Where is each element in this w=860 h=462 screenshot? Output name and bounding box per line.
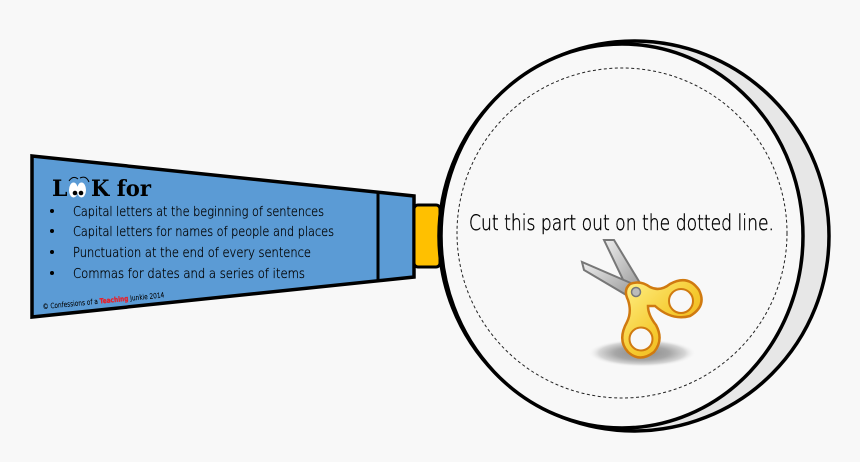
icon: scissors [582,240,702,367]
heading: Look for: L [52,176,67,202]
checklist: Capital letters for names of people and places [73,224,334,240]
checklist: Punctuation at the end of every sentence [73,245,311,261]
magnifying glass handle [32,156,414,317]
cut instruction: Cut this part out on the dotted line. [469,211,774,235]
yellow connector [414,205,440,267]
dotted cut line [457,68,787,398]
magnifying glass rim [439,41,829,431]
heading: Look for [52,176,151,202]
checklist: Capital letters at the beginning of sentences [73,204,324,220]
heading: Look for: K for [91,176,151,202]
checklist [50,204,334,282]
checklist: Commas for dates and a series of items [73,266,305,282]
copyright credit: © Confessions of a Teaching Junkie 2014 [42,291,165,311]
